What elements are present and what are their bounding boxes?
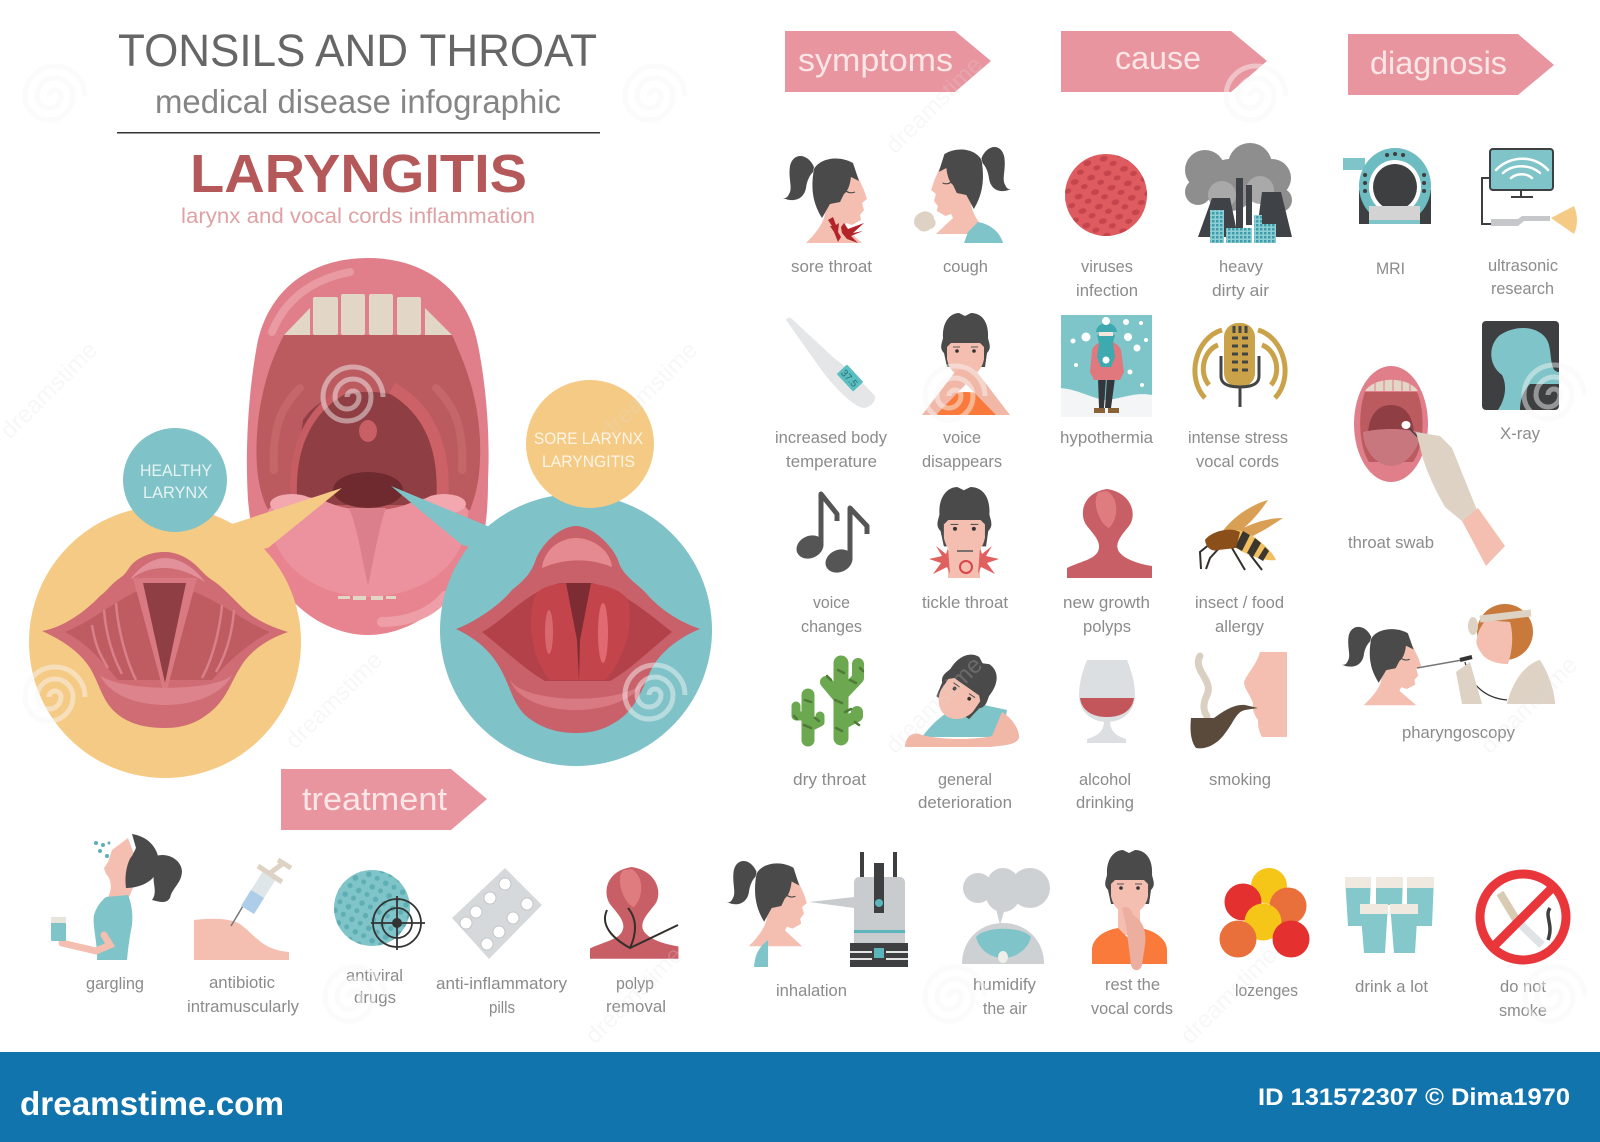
brand name: dreamstime.com <box>20 1085 284 1122</box>
label: inhalation: inhalation <box>776 981 847 1000</box>
label bubble: healthy larynx: HEALTHY <box>140 461 212 480</box>
label: tickle throat: tickle throat <box>922 593 1008 612</box>
icon: polyp removal <box>590 867 678 959</box>
label: polyp removal <box>606 974 666 1016</box>
image id and author: ID 131572307 © Dima1970 <box>1258 1084 1570 1111</box>
icon: injection <box>194 860 291 960</box>
label: new growth polyps: polyps <box>1083 617 1131 636</box>
label: increased body temperature: increased body <box>775 428 887 447</box>
label: antiviral drugs: antiviral <box>346 966 403 985</box>
label: ultrasonic research: ultrasonic <box>1488 256 1558 275</box>
label: new growth polyps <box>1063 593 1150 636</box>
label: polyp removal: polyp <box>616 974 654 993</box>
icon: ultrasound <box>1482 149 1577 234</box>
label: voice changes: voice <box>813 593 850 612</box>
tag: treatment <box>281 769 487 830</box>
label bubble: sore larynx laryngitis: SORE LARYNX <box>534 429 643 448</box>
label: viruses infection: infection <box>1076 281 1138 300</box>
lower teeth <box>338 596 396 600</box>
tag: cause: cause <box>1115 40 1201 76</box>
panel: treatment <box>51 834 1566 1020</box>
watermark text: dreamstime <box>595 336 703 444</box>
label: viruses infection <box>1076 257 1138 300</box>
label bubble: healthy larynx <box>123 428 227 532</box>
label: voice disappears: voice <box>943 428 981 447</box>
icon: general deterioration <box>905 646 1019 747</box>
label: cough: cough <box>943 257 988 276</box>
label: lozenges: lozenges <box>1235 981 1298 1000</box>
subtitle: medical disease infographic <box>155 83 561 120</box>
label: rest the vocal cords: rest the <box>1105 975 1160 994</box>
panel: symptoms <box>775 147 1019 812</box>
label: insect / food allergy: allergy <box>1215 617 1264 636</box>
label: voice disappears: disappears <box>922 452 1002 471</box>
icon: X-ray <box>1482 321 1559 410</box>
icon: virus <box>1065 154 1147 236</box>
watermark text: dreamstime <box>880 651 988 759</box>
label: intense stress vocal cords: intense stress <box>1188 428 1288 447</box>
label: heavy dirty air <box>1212 257 1269 300</box>
label: anti-inflammatory pills: pills <box>489 998 515 1017</box>
tag: cause <box>1061 31 1267 92</box>
label: heavy dirty air: heavy <box>1219 257 1263 276</box>
tag: treatment: treatment <box>302 781 447 817</box>
icon: cactus, dry throat <box>794 663 863 740</box>
icon: antiviral target <box>334 870 425 950</box>
sore larynx circle <box>440 494 712 766</box>
label: antibiotic intramuscularly: antibiotic <box>209 973 275 992</box>
label: ultrasonic research <box>1488 256 1558 298</box>
icon: voice changes <box>793 494 867 577</box>
illustration: open mouth with larynx views <box>29 258 712 778</box>
icon: throat swab <box>1354 366 1505 566</box>
icon: factory smoke <box>1185 143 1292 243</box>
label: insect / food allergy: insect / food <box>1195 593 1284 612</box>
disease description: larynx and vocal cords inflammation <box>181 205 535 228</box>
label: humidify the air <box>973 975 1036 1018</box>
label: alcohol drinking: drinking <box>1076 793 1134 812</box>
label: voice changes <box>801 593 862 636</box>
icon: wasp <box>1200 500 1283 570</box>
icon: tickle throat <box>929 487 999 578</box>
label: antiviral drugs <box>346 966 403 1007</box>
icon: no smoking <box>1480 874 1566 960</box>
label: alcohol drinking <box>1076 770 1134 812</box>
icon: pharyngoscopy <box>1342 604 1555 705</box>
open mouth <box>247 258 489 635</box>
icon: rest the vocal cords <box>1092 850 1167 970</box>
label: dry throat: dry throat <box>793 770 866 789</box>
icon: cough <box>914 147 1011 243</box>
label: MRI: MRI <box>1376 259 1405 278</box>
icon: hypothermia <box>1061 315 1152 417</box>
watermark text: dreamstime <box>1475 651 1583 759</box>
icon: inhalation <box>727 852 908 967</box>
label: anti-inflammatory pills <box>436 974 567 1017</box>
label: increased body temperature <box>775 428 887 471</box>
label: intense stress vocal cords <box>1188 428 1288 471</box>
watermark text: dreamstime <box>580 941 688 1049</box>
label: general deterioration: general <box>938 770 992 789</box>
icon: sore throat <box>783 156 867 243</box>
disease name: LARYNGITIS <box>190 144 527 204</box>
label: ultrasonic research: research <box>1491 279 1554 298</box>
tag: diagnosis <box>1348 34 1554 95</box>
label: do not smoke: do not <box>1500 977 1546 996</box>
panel: diagnosis <box>1342 148 1577 742</box>
label: voice changes: changes <box>801 617 862 636</box>
label: new growth polyps: new growth <box>1063 593 1150 612</box>
label: anti-inflammatory pills: anti-inflammatory <box>436 974 567 993</box>
icon: voice disappears <box>922 313 1010 415</box>
label: increased body temperature: temperature <box>786 452 877 471</box>
icon: wine glass <box>1079 660 1135 743</box>
label: insect / food allergy <box>1195 593 1284 636</box>
label: polyp removal: removal <box>606 997 666 1016</box>
label: heavy dirty air: dirty air <box>1212 281 1269 300</box>
icon: humidifier <box>962 868 1050 964</box>
label bubble: sore larynx laryngitis: LARYNGITIS <box>542 452 635 471</box>
main title: TONSILS AND THROAT <box>118 25 597 76</box>
label: do not smoke: smoke <box>1499 1001 1547 1020</box>
healthy larynx circle <box>29 506 301 778</box>
label: drink a lot: drink a lot <box>1355 977 1428 996</box>
icon: microphone <box>1195 323 1285 407</box>
icon: smoking pipe <box>1191 652 1287 748</box>
watermark text: dreamstime <box>880 51 988 159</box>
footer banner <box>0 1052 1600 1142</box>
tag: diagnosis: diagnosis <box>1370 45 1507 81</box>
label: antibiotic intramuscularly: intramuscularly <box>187 997 299 1016</box>
label: antibiotic intramuscularly <box>187 973 299 1016</box>
icon: polyp <box>1067 489 1152 578</box>
watermark text: dreamstime <box>1175 941 1283 1049</box>
icon: MRI <box>1343 148 1431 224</box>
label: X-ray: X-ray <box>1500 424 1540 443</box>
title block <box>117 25 600 228</box>
label: sore throat: sore throat <box>791 257 872 276</box>
label bubble: healthy larynx: LARYNX <box>143 483 208 502</box>
icon: thermometer: 37.5 <box>838 368 860 390</box>
label: antiviral drugs: drugs <box>354 988 396 1007</box>
callout pointers <box>200 486 530 560</box>
panel: cause <box>1060 143 1292 812</box>
label: smoking: smoking <box>1209 770 1271 789</box>
label: hypothermia: hypothermia <box>1060 428 1154 447</box>
label: humidify the air: the air <box>983 999 1027 1018</box>
icon: pills blister <box>452 868 542 959</box>
label: voice disappears <box>922 428 1002 471</box>
tag: symptoms: symptoms <box>798 42 953 78</box>
icon: thermometer <box>786 318 875 408</box>
label: rest the vocal cords <box>1091 975 1173 1018</box>
label: viruses infection: viruses <box>1081 257 1133 276</box>
icon: lozenges <box>1220 868 1310 958</box>
label: do not smoke <box>1499 977 1547 1020</box>
label: general deterioration: deterioration <box>918 793 1012 812</box>
tag: symptoms <box>785 31 991 92</box>
watermark text: dreamstime <box>280 646 388 754</box>
label bubble: sore larynx laryngitis <box>526 380 654 508</box>
upper teeth <box>284 294 452 335</box>
label: intense stress vocal cords: vocal cords <box>1196 452 1279 471</box>
icon: gargling <box>51 834 182 960</box>
icon: glasses of water <box>1345 877 1434 953</box>
label: humidify the air: humidify <box>973 975 1036 994</box>
label: throat swab: throat swab <box>1348 533 1434 552</box>
label: general deterioration <box>918 770 1012 812</box>
label: pharyngoscopy: pharyngoscopy <box>1402 723 1515 742</box>
label: rest the vocal cords: vocal cords <box>1091 999 1173 1018</box>
label: gargling: gargling <box>86 974 144 993</box>
label: alcohol drinking: alcohol <box>1079 770 1131 789</box>
